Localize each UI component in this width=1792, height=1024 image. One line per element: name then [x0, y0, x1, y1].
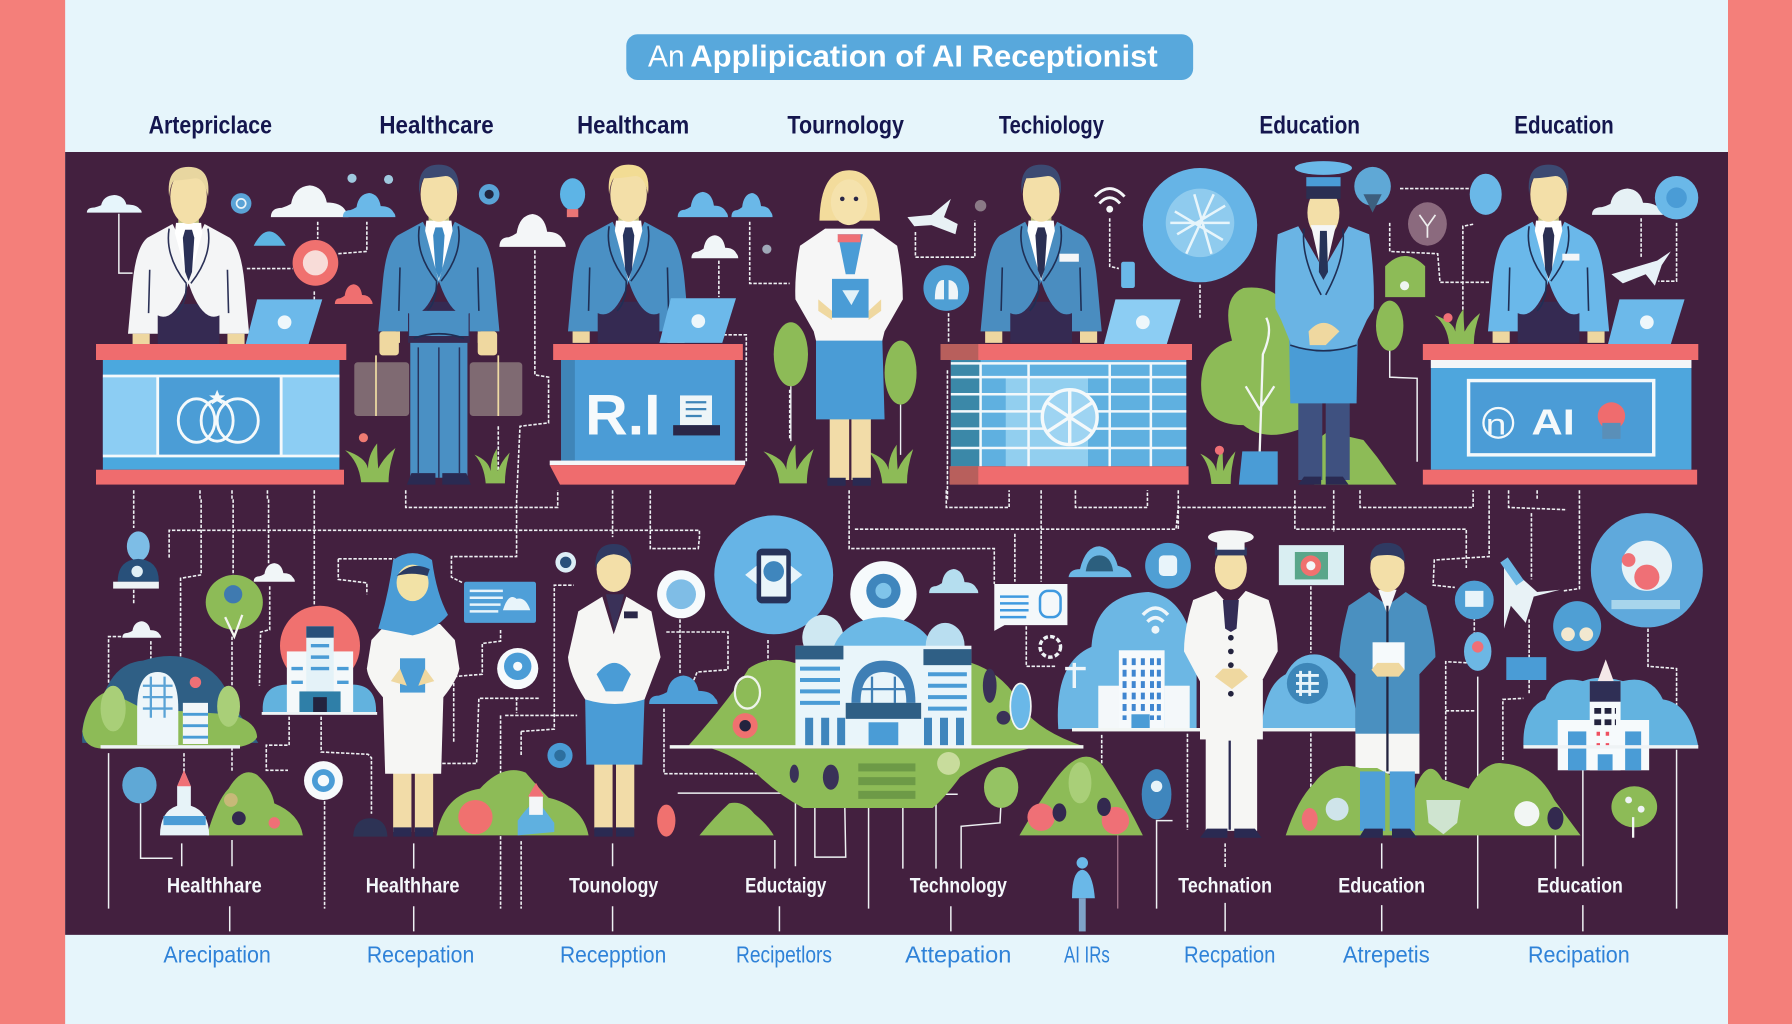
green bush and sapling — [1200, 256, 1425, 485]
top category labels: Education — [1514, 112, 1614, 140]
blue reception labels: Recipation — [1528, 941, 1630, 967]
connector lines — [109, 189, 1677, 931]
left coral band — [0, 0, 65, 1024]
person 8: woman in hijab — [367, 553, 459, 837]
plants near person 2 — [345, 433, 510, 483]
person 11: man holding card — [1339, 543, 1435, 774]
top category labels: Artepriclace — [149, 112, 272, 140]
laptop 3 — [659, 298, 736, 343]
top category labels: Tournology — [787, 112, 904, 140]
hill with trees — [984, 757, 1171, 835]
top category labels: Techiology — [999, 112, 1104, 140]
top category labels: Healthcare — [379, 112, 494, 140]
blue reception labels — [163, 941, 1630, 967]
blue reception labels: Recepation — [367, 941, 474, 967]
hill with lighthouse — [437, 770, 589, 835]
top category labels: Healthcam — [577, 112, 689, 140]
person 10: chef in white — [1184, 530, 1278, 838]
big phone circle icon — [714, 515, 833, 634]
white sector labels — [167, 873, 1623, 898]
icons around person 4 and 5 — [907, 189, 1135, 311]
big network circle icon — [1143, 168, 1257, 282]
central campus building and green hill — [670, 615, 1083, 808]
person 7 behind desk — [1488, 165, 1609, 343]
big city cloud with wifi — [1058, 592, 1355, 731]
reception desk 4 with AI sign: n — [1486, 408, 1506, 441]
laptop 7 — [1608, 299, 1685, 344]
hills in front of man — [1286, 763, 1657, 838]
icons: top left — [231, 174, 771, 286]
icons above chef — [1069, 543, 1344, 589]
reception desk 4 with AI sign: AI — [1531, 401, 1575, 442]
info card — [464, 582, 536, 623]
blue reception labels: Arecipation — [163, 941, 271, 967]
white sector labels: Technation — [1178, 873, 1272, 898]
reception desk 4 with AI sign — [1423, 344, 1698, 485]
dark main panel — [65, 152, 1728, 935]
white sector labels: Eductaigy — [745, 873, 826, 898]
title banner: Applipication of AI Receptionist — [690, 38, 1158, 73]
title banner: An — [648, 38, 685, 73]
laptop 5 — [1104, 299, 1181, 344]
person 3 behind desk — [568, 165, 689, 343]
title banner — [626, 34, 1193, 80]
white sector labels: Healthhare — [167, 873, 262, 898]
reception desk 1 — [96, 344, 346, 485]
badges near center — [497, 552, 718, 704]
person 2 with suitcases — [354, 165, 522, 485]
white sector labels: Education — [1537, 873, 1623, 898]
reception desk 2: R.I — [585, 383, 661, 447]
right campus building on cloud — [1523, 659, 1698, 770]
blue reception labels: Recpation — [1184, 941, 1275, 967]
small blue figure — [1072, 857, 1095, 931]
blue reception labels: Attepation — [905, 941, 1011, 967]
laptop 1 — [246, 299, 322, 344]
white sector labels: Healthhare — [366, 873, 459, 898]
location pin badge — [850, 561, 917, 627]
right coral band — [1728, 0, 1792, 1024]
top category labels — [149, 112, 1614, 140]
small tower and hill — [160, 770, 303, 835]
campus building 2 with red dome — [262, 606, 377, 715]
icons around person 6 and 7 — [1354, 167, 1698, 344]
person 1 behind desk — [128, 167, 249, 345]
reception desk 3 with window grid — [941, 344, 1192, 485]
reception desk 2 — [550, 344, 745, 485]
white sector labels: Education — [1338, 873, 1425, 898]
person 9: woman in white jacket — [568, 544, 661, 837]
white sector labels: Technology — [910, 873, 1007, 898]
person 4: woman with tablet — [763, 170, 917, 486]
blue reception labels: AI IRs — [1064, 941, 1110, 967]
small hill — [699, 803, 774, 835]
person 5 behind desk — [981, 165, 1102, 343]
blue reception labels: Recepption — [560, 941, 666, 967]
robot icon — [113, 531, 159, 589]
blue reception labels: Recipetlors — [736, 941, 832, 967]
cloud cluster: top row — [87, 185, 1663, 304]
white sector labels: Tounology — [569, 873, 658, 898]
blue reception labels: Atrepetis — [1343, 941, 1430, 967]
clouds and speech card — [929, 569, 1067, 657]
person 6: cap and coat — [1275, 161, 1374, 485]
campus building 1 — [82, 656, 258, 749]
icons right cluster — [1455, 513, 1703, 680]
clouds and badges: lower left — [122, 563, 675, 837]
top category labels: Education — [1259, 112, 1360, 140]
